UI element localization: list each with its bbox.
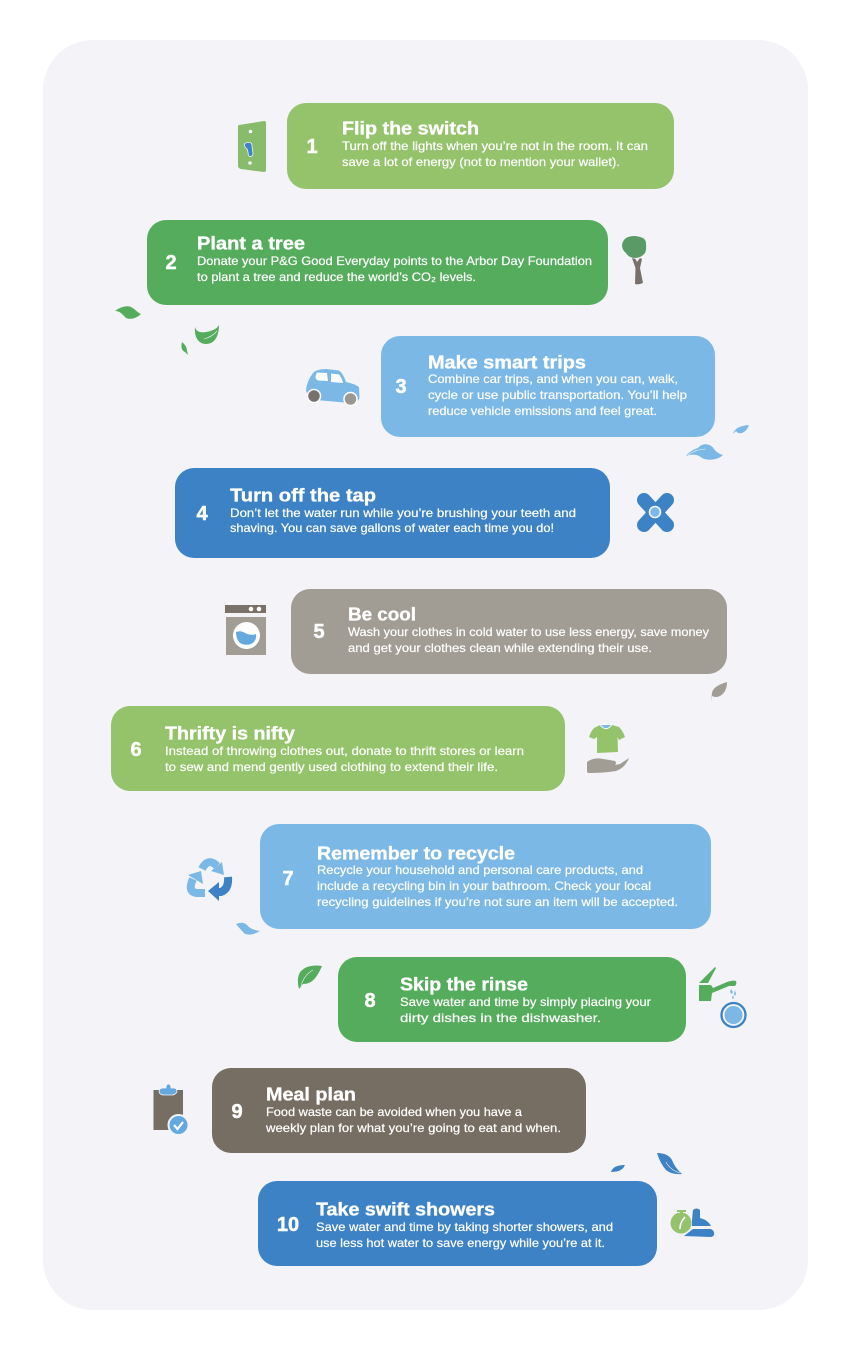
heading 6: Thrifty is nifty [165, 722, 296, 744]
body 1: save a lot of energy (not to mention your wallet). [342, 155, 620, 169]
icon: stopwatch and shower [670, 1208, 714, 1237]
body 6: to sew and mend gently used clothing to extend their life. [165, 760, 498, 774]
card 10 background [258, 1181, 657, 1266]
leaf [657, 1153, 682, 1174]
icon: shirt in hand [587, 724, 629, 773]
body 10 [316, 1220, 613, 1250]
card 6 background [111, 706, 565, 791]
heading 7: Remember to recycle [317, 842, 515, 864]
step 10: take swift showers [258, 1181, 657, 1266]
heading 1: Flip the switch [342, 118, 479, 138]
number 1: 1 [306, 136, 318, 158]
icon: tree [622, 236, 646, 284]
card 1 background [287, 103, 674, 189]
leaf [181, 342, 188, 355]
body 8: dirty dishes in the dishwasher. [400, 1011, 601, 1025]
card 2 background [147, 220, 608, 305]
body 10: use less hot water to save energy while you’re at it. [316, 1236, 605, 1250]
step 1: flip the switch [287, 103, 674, 189]
body 5 [348, 625, 709, 655]
heading 5: Be cool [348, 604, 416, 624]
icon: tap handle [644, 500, 667, 525]
number 7: 7 [282, 868, 294, 890]
icon: clipboard with check [154, 1084, 188, 1135]
body 2: to plant a tree and reduce the world’s CO₂ levels. [197, 270, 476, 284]
leaf [686, 444, 723, 460]
card 4 background [175, 468, 610, 558]
body 3: reduce vehicle emissions and feel great. [428, 404, 657, 418]
number 8: 8 [364, 990, 376, 1012]
body 3 [428, 372, 687, 418]
card 8 background [338, 957, 686, 1042]
leaf [298, 966, 322, 989]
card 9 background [212, 1068, 586, 1153]
heading 2: Plant a tree [197, 232, 305, 254]
card 7 background [260, 824, 711, 929]
leaf [733, 425, 749, 434]
number 3: 3 [395, 376, 407, 398]
leaf [611, 1165, 625, 1172]
card 5 background [291, 589, 727, 674]
body 3: cycle or use public transportation. You’ll help [428, 388, 687, 402]
heading 3: Make smart trips [428, 352, 586, 372]
icon: washing machine [225, 605, 266, 655]
body 4: Don’t let the water run while you’re brushing your teeth and [230, 506, 576, 520]
body 10: Save water and time by taking shorter showers, and [316, 1220, 613, 1234]
step 4: turn off the tap [175, 468, 610, 558]
number 10: 10 [277, 1214, 299, 1236]
leaf [236, 923, 260, 935]
body 1 [342, 139, 648, 169]
leaf [115, 306, 141, 319]
icon: light switch [238, 121, 266, 172]
body 8: Save water and time by simply placing your [400, 995, 651, 1009]
step 6: thrifty is nifty [111, 706, 565, 791]
body 9: weekly plan for what you’re going to eat and when. [265, 1121, 561, 1135]
body 7: recycling guidelines if you’re not sure an item will be accepted. [317, 895, 678, 909]
step 3: smart trips [381, 336, 715, 437]
body 4: shaving. You can save gallons of water each time you do! [230, 521, 554, 535]
number 9: 9 [231, 1101, 243, 1123]
leaf [711, 682, 727, 702]
icon: recycling arrows [188, 862, 228, 901]
body 2 [197, 254, 592, 284]
body 7: Recycle your household and personal care products, and [317, 863, 643, 877]
step 7: remember to recycle [260, 824, 711, 929]
body 2: Donate your P&G Good Everyday points to the Arbor Day Foundation [197, 254, 592, 268]
body 7: include a recycling bin in your bathroom. Check your local [317, 879, 651, 893]
body 9: Food waste can be avoided when you have a [266, 1105, 522, 1119]
body 5: Wash your clothes in cold water to use less energy, save money [348, 625, 709, 639]
body 5: and get your clothes clean while extending their use. [348, 641, 652, 655]
body 6: Instead of throwing clothes out, donate to thrift stores or learn [165, 744, 524, 758]
leaf [195, 325, 219, 344]
heading 9: Meal plan [266, 1084, 356, 1104]
icon: car [306, 369, 360, 406]
step 2: plant a tree [147, 220, 608, 305]
body 8 [400, 995, 651, 1025]
number 4: 4 [196, 503, 208, 525]
step 9: meal plan [212, 1068, 586, 1153]
step 8: skip the rinse [338, 957, 686, 1042]
body 1: Turn off the lights when you’re not in the room. It can [342, 139, 648, 153]
body 4 [230, 506, 576, 535]
number 5: 5 [313, 621, 325, 643]
heading 10: Take swift showers [316, 1198, 495, 1220]
body 3: Combine car trips, and when you can, walk, [428, 372, 678, 386]
step 5: be cool [291, 589, 727, 674]
card 3 background [381, 336, 715, 437]
heading 4: Turn off the tap [230, 484, 376, 506]
body 7 [317, 863, 678, 909]
heading 8: Skip the rinse [400, 974, 528, 994]
number 6: 6 [130, 739, 142, 761]
body 6 [165, 744, 524, 774]
icon: faucet and plate [699, 967, 746, 1027]
number 2: 2 [165, 252, 177, 274]
body 9 [265, 1105, 561, 1135]
